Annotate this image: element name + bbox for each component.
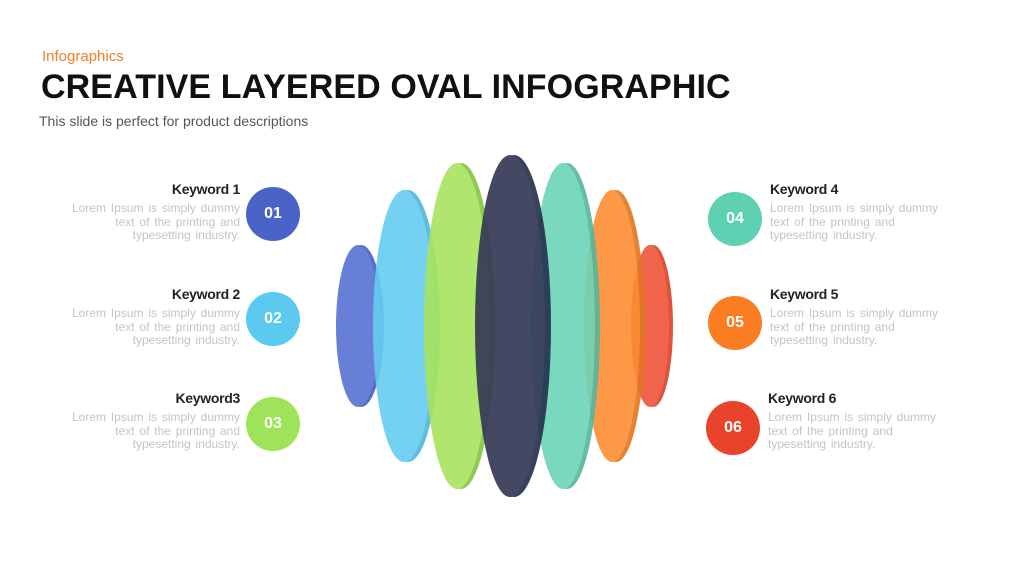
tagline: This slide is perfect for product descriptions [39,113,308,129]
item 5: typesetting industry. [770,333,877,347]
badge 05: 05 [726,314,744,331]
item 5: Keyword 5 [770,286,838,302]
item 2: Lorem Ipsum is simply dummy [72,306,240,320]
title: CREATIVE LAYERED OVAL INFOGRAPHIC [41,68,731,106]
item 5: text of the printing and [770,320,895,334]
item 3: Lorem Ipsum is simply dummy [72,410,240,424]
oval navy [475,155,551,497]
badge 04: 04 [726,210,744,227]
item 4 [770,181,938,242]
item 4: Keyword 4 [770,181,838,197]
item 3: typesetting industry. [133,437,240,451]
badge 06: 06 [724,419,742,436]
subtitle label: Infographics [42,48,124,65]
item 3: Keyword3 [175,390,240,406]
item 2 [72,286,240,347]
item 3 [72,390,240,451]
item 2: Keyword 2 [172,286,240,302]
badge 06 [706,401,760,455]
item 1 [72,181,240,242]
item 4: text of the printing and [770,214,895,228]
badge 02: 02 [264,310,282,327]
oval light blue [373,190,440,462]
item 6: Lorem Ipsum is simply dummy [768,410,936,424]
oval red [631,245,673,407]
item 5 [770,286,938,347]
item 1: Lorem Ipsum is simply dummy [72,201,240,215]
item 6: Keyword 6 [768,390,836,406]
badge 05 [708,296,762,350]
badge 02 [246,292,300,346]
item 1: text of the printing and [115,214,240,228]
oval green [424,163,495,489]
item 3: text of the printing and [115,424,240,438]
oval teal [531,163,600,489]
item 6 [768,390,936,451]
item 2: text of the printing and [115,320,240,334]
item 4: Lorem Ipsum is simply dummy [770,201,938,215]
oval orange [584,190,645,462]
item 6: typesetting industry. [768,437,875,451]
badge 03 [246,397,300,451]
oval blue [336,245,384,407]
item 6: text of the printing and [768,424,893,438]
item 5: Lorem Ipsum is simply dummy [770,306,938,320]
item 4: typesetting industry. [770,228,877,242]
item 1: Keyword 1 [172,181,240,197]
badge 01: 01 [264,205,282,222]
item 2: typesetting industry. [133,333,240,347]
badge 04 [708,192,762,246]
badge 03: 03 [264,415,282,432]
item 1: typesetting industry. [133,228,240,242]
badge 01 [246,187,300,241]
